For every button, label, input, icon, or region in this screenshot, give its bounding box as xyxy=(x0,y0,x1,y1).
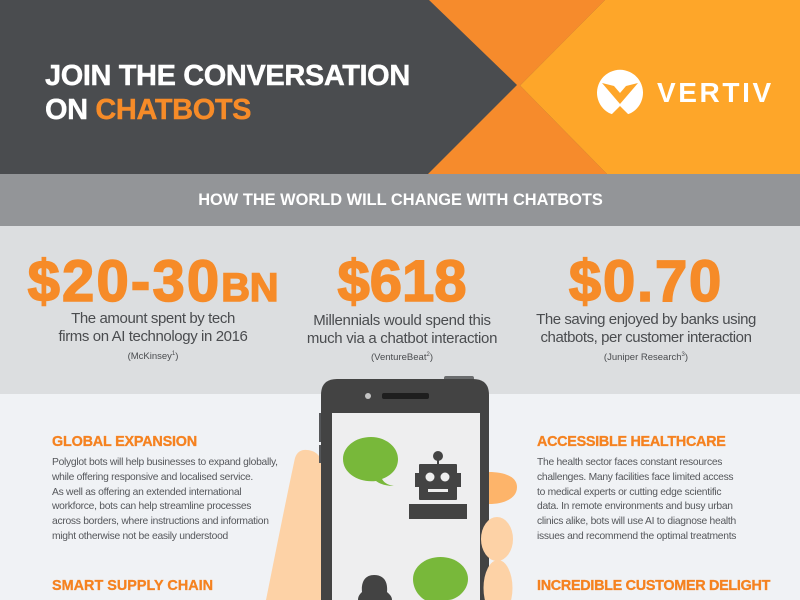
title: ON CHATBOTS xyxy=(45,94,251,126)
title xyxy=(45,60,410,126)
subtitle band xyxy=(0,174,800,226)
stat: bank savings: (Juniper Research3) xyxy=(604,352,688,363)
block: global expansion: while offering responsive and localised service. xyxy=(52,472,253,483)
icon: person xyxy=(358,575,392,600)
phone illustration xyxy=(266,376,517,600)
heading: incredible customer delight: INCREDIBLE CUSTOMER DELIGHT xyxy=(537,578,770,594)
stat: bank savings xyxy=(536,249,756,363)
icon: palm and thumb xyxy=(266,450,326,600)
subtitle heading: HOW THE WORLD WILL CHANGE WITH CHATBOTS xyxy=(198,191,603,209)
stat: millennials: Millennials would spend this xyxy=(313,312,491,329)
block: global expansion xyxy=(52,434,278,542)
block: global expansion: GLOBAL EXPANSION xyxy=(52,434,197,450)
icon: fingers xyxy=(481,472,517,600)
block: accessible healthcare: issues and recommend the optimal treatments xyxy=(537,531,736,542)
block: global expansion: across borders, where instructions and information xyxy=(52,516,269,527)
icon: green speech bubble top xyxy=(343,437,398,486)
icon: phone body xyxy=(319,376,489,600)
block: accessible healthcare: to medical experts or cutting edge scientific xyxy=(537,487,721,498)
icon: green speech bubble bottom xyxy=(413,557,468,600)
stat: spend on AI xyxy=(28,249,278,362)
stat: bank savings: The saving enjoyed by banks using xyxy=(536,311,756,328)
logo: Vertiv xyxy=(597,70,774,114)
stat: spend on AI: (McKinsey1) xyxy=(128,351,178,362)
stat: spend on AI: The amount spent by tech xyxy=(71,310,235,327)
panel: statistics xyxy=(0,226,800,394)
block: accessible healthcare: clinics alike, bots will use AI to diagnose health xyxy=(537,516,736,527)
block: global expansion: Polyglot bots will help businesses to expand globally, xyxy=(52,457,278,468)
stat: spend on AI: $20-30BN xyxy=(28,249,278,314)
block: accessible healthcare: The health sector faces constant resources xyxy=(537,457,722,468)
stat: spend on AI: firms on AI technology in 2016 xyxy=(59,328,247,345)
header banner xyxy=(0,0,800,174)
block: accessible healthcare xyxy=(537,434,736,542)
stat: millennials: $618 xyxy=(337,249,467,314)
title: JOIN THE CONVERSATION xyxy=(45,60,410,92)
logo: Vertiv: VERTIV xyxy=(657,77,774,108)
stat: millennials xyxy=(307,249,497,363)
block: accessible healthcare: challenges. Many facilities face limited access xyxy=(537,472,733,483)
block: accessible healthcare: data. In remote environments and busy urban xyxy=(537,501,733,512)
stat: millennials: much via a chatbot interaction xyxy=(307,330,497,347)
stat: millennials: (VentureBeat2) xyxy=(371,352,433,363)
icon: robot xyxy=(409,451,467,519)
block: global expansion: might otherwise not be easily understood xyxy=(52,531,228,542)
block: global expansion: As well as offering an extended international xyxy=(52,487,241,498)
stat: bank savings: $0.70 xyxy=(569,249,723,314)
block: global expansion: workforce, bots can help streamline processes xyxy=(52,501,251,512)
stat: bank savings: chatbots, per customer interaction xyxy=(540,329,752,346)
block: accessible healthcare: ACCESSIBLE HEALTHCARE xyxy=(537,434,726,450)
heading: smart supply chain: SMART SUPPLY CHAIN xyxy=(52,578,213,594)
